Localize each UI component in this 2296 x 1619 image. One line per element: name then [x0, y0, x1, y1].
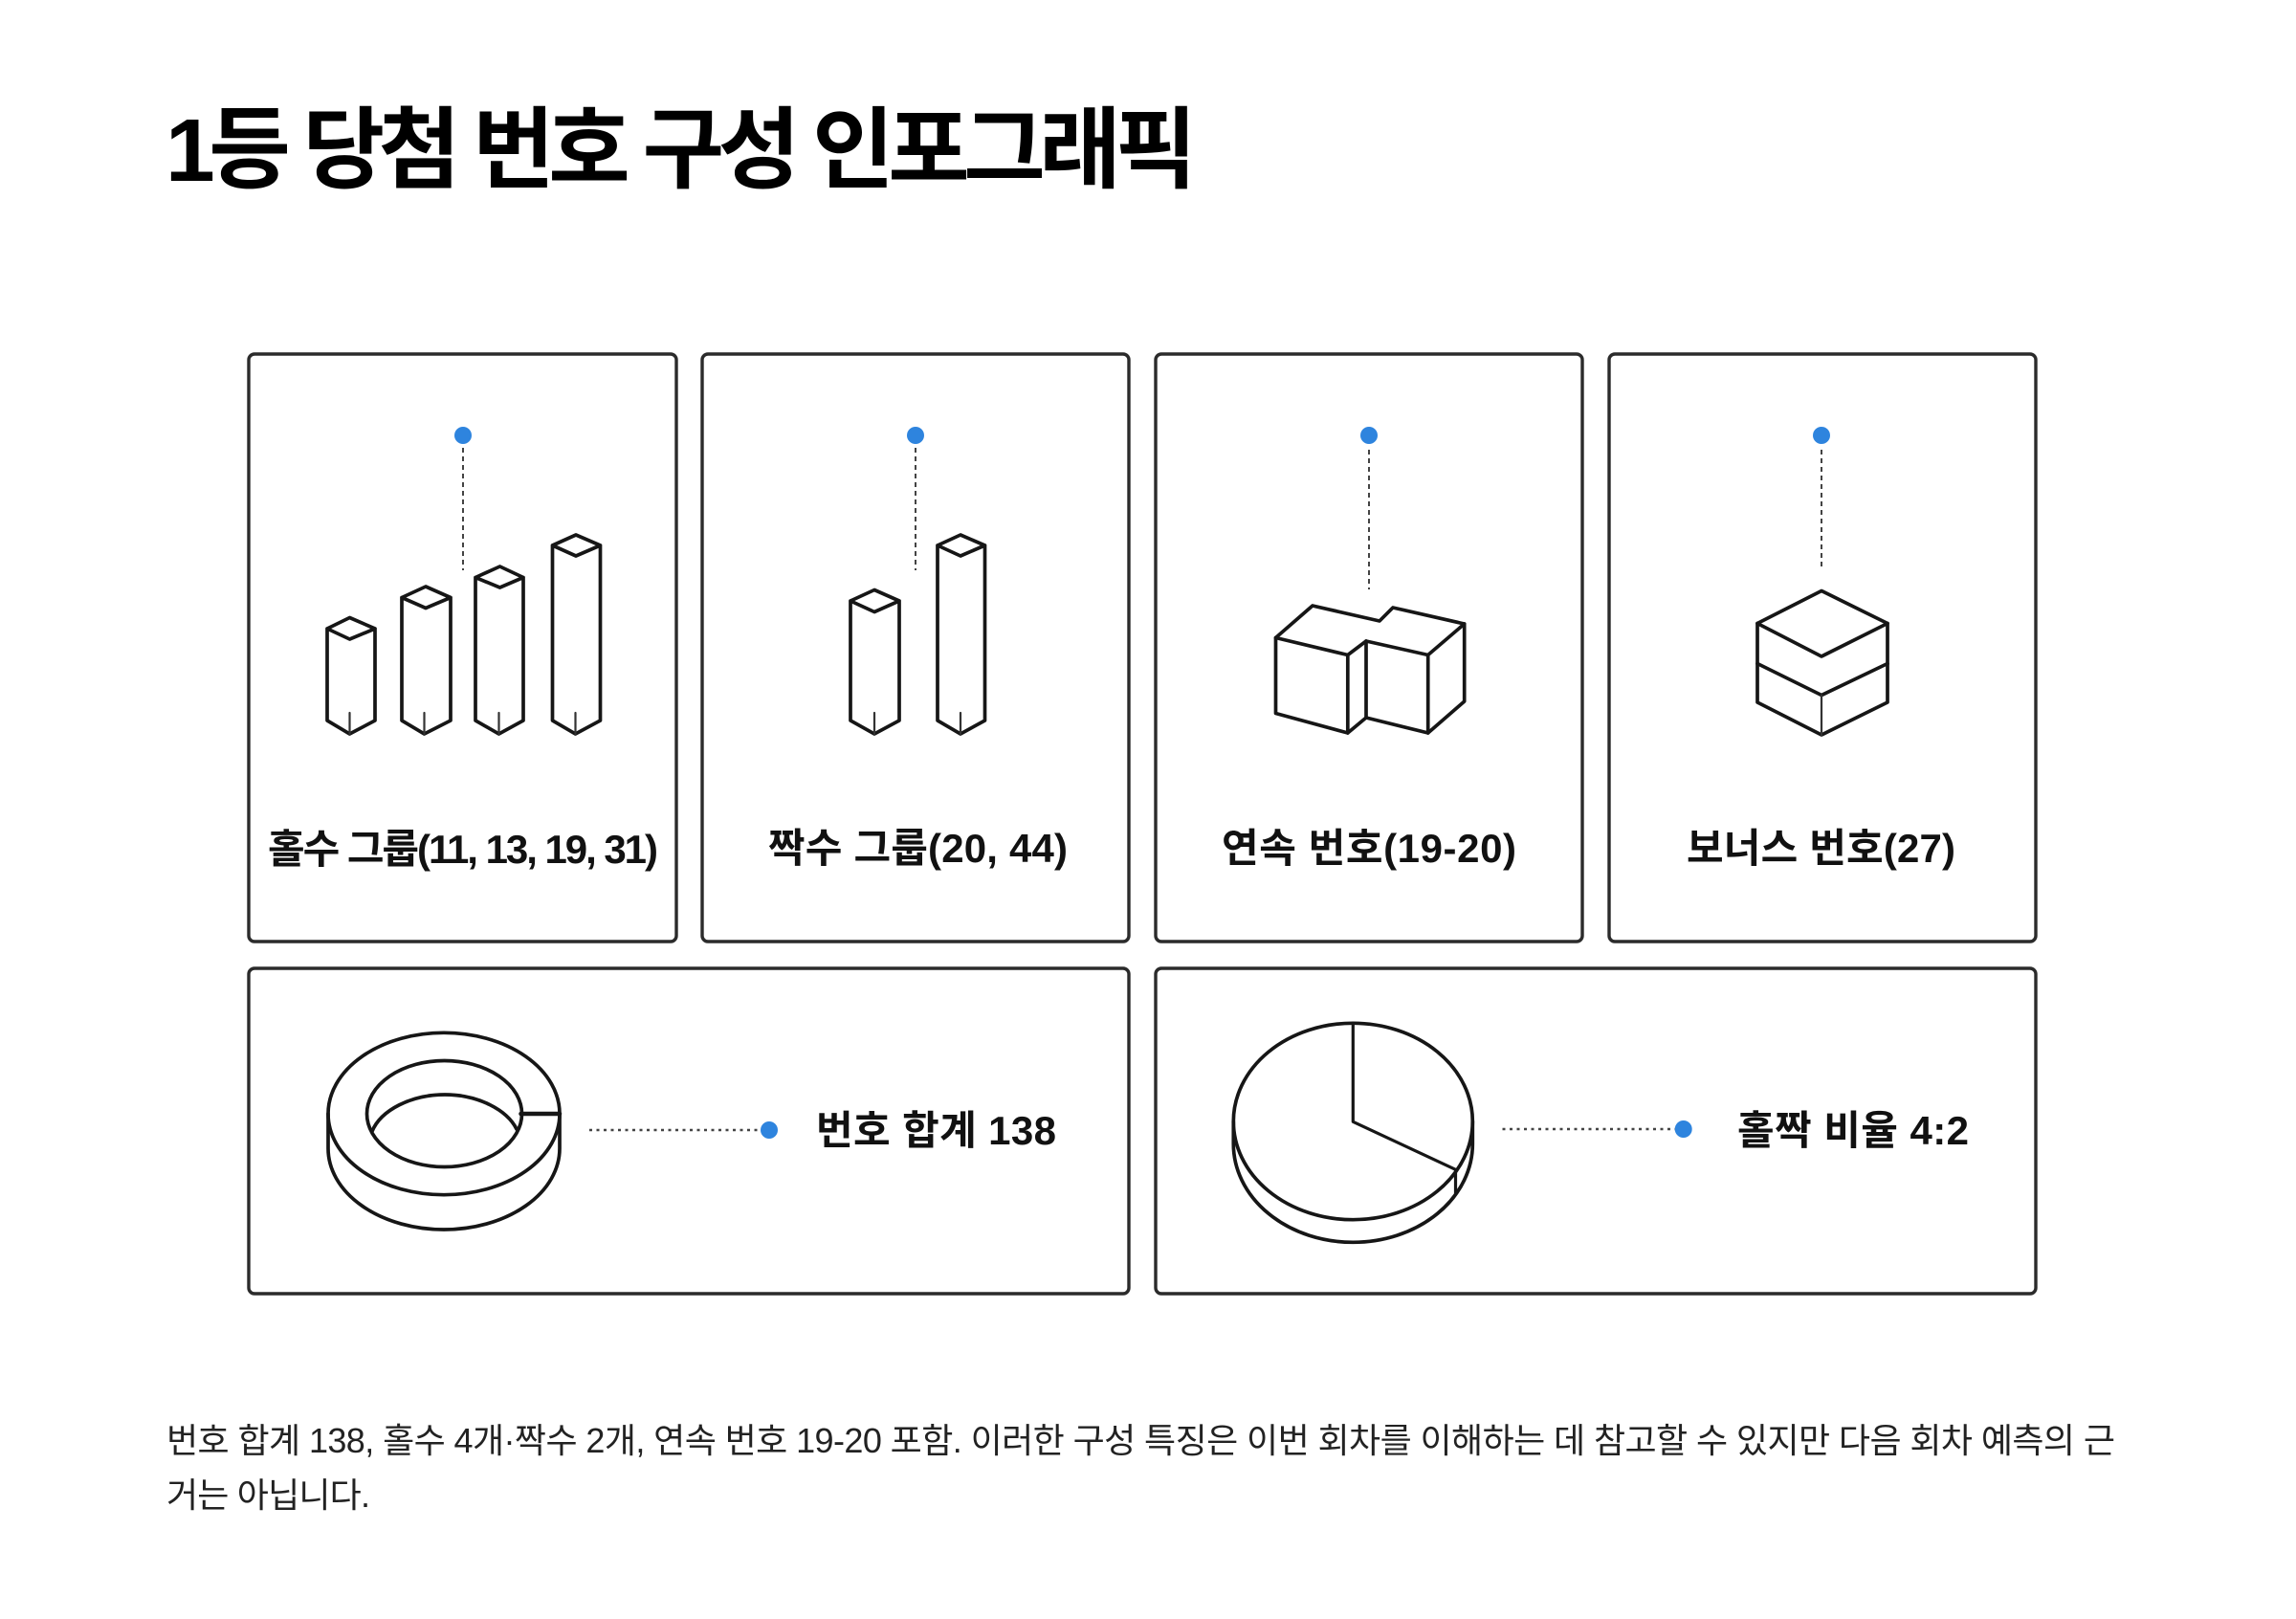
panel: odd group	[249, 354, 676, 942]
label: odd-even ratio: 홀짝 비율 4:2	[1737, 1108, 1969, 1153]
label: bonus number: 보너스 번호(27)	[1687, 826, 1955, 871]
marker: odd group dot and leader	[454, 427, 472, 570]
icon: pie chart	[1233, 1023, 1472, 1242]
icon: two isometric bars	[850, 535, 985, 734]
text block: description	[166, 1421, 2115, 1515]
icon: two joined blocks	[1276, 606, 1465, 733]
marker: consecutive dot and leader	[1360, 427, 1378, 589]
title: 1등 당첨 번호 구성 인포그래픽	[166, 100, 1197, 200]
text block: description: 거는 아닙니다.	[166, 1475, 370, 1515]
icon: ring	[328, 1032, 560, 1230]
label: number sum: 번호 합계 138	[816, 1108, 1056, 1153]
marker: bonus dot and leader	[1813, 427, 1830, 569]
icon: four isometric bars	[327, 535, 601, 734]
panel: consecutive numbers	[1156, 354, 1582, 942]
connector: ratio dotted line and dot	[1502, 1120, 1692, 1138]
connector: sum dotted line and dot	[589, 1121, 778, 1139]
icon: stacked cube	[1757, 591, 1888, 735]
panel: number sum	[249, 968, 1129, 1294]
label: consecutive numbers: 연속 번호(19-20)	[1222, 826, 1516, 871]
panel: even group	[702, 354, 1129, 942]
panel: bonus number	[1609, 354, 2036, 942]
marker: even group dot and leader	[907, 427, 924, 570]
label: odd group: 홀수 그룹(11, 13, 19, 31)	[268, 827, 658, 872]
panel: odd-even ratio	[1156, 968, 2036, 1294]
label: even group: 짝수 그룹(20, 44)	[768, 826, 1068, 871]
text block: description: 번호 합계 138, 홀수 4개·짝수 2개, 연속 번호 19-20 포함. 이러한 구성 특징은 이번 회차를 이해하는 데 참고할 수 있지만 다음 회차 예측의 근	[166, 1421, 2115, 1460]
